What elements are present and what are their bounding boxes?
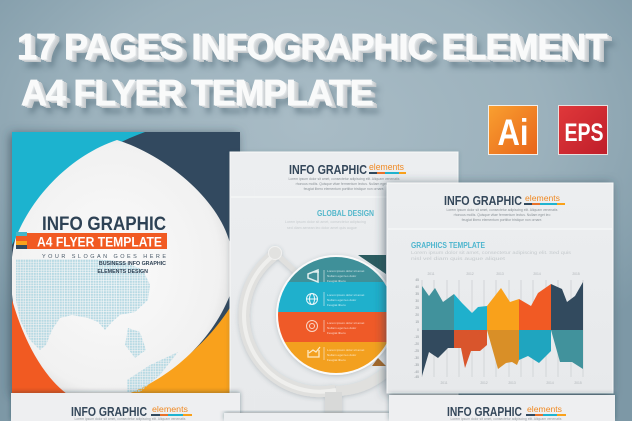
cover orange banner: A4 FLYER TEMPLATE [37, 234, 162, 250]
page header: rhoncus mollis. Quisque vitae fermentum lectus. Nullam eget leo [454, 213, 550, 217]
icon: chart [308, 347, 320, 357]
panel: bottom right page: INFO GRAPHIC [447, 405, 522, 419]
page header [288, 162, 406, 191]
chart y axis labels: -25 [414, 349, 419, 353]
chart upper areas [422, 282, 583, 330]
chart y axis labels: 40 [415, 285, 419, 289]
cover stripe accent [16, 232, 27, 249]
chart y axis labels: 25 [415, 306, 419, 310]
page header: INFO GRAPHIC [289, 163, 367, 177]
panel: bottom right page: Lorem ipsum dolor sit amet, consectetur adipiscing elit. Aliquam venenatis [450, 417, 562, 421]
chart y axis labels: -40 [414, 370, 419, 374]
page header: feugiat libero elementum porttitor tristique non ornare. [304, 187, 384, 191]
cover subheading: ELEMENTS DESIGN [97, 269, 148, 275]
band captions: Nullam eget leo dolor [327, 274, 356, 278]
page header [444, 193, 565, 222]
page header: rhoncus mollis. Quisque vitae fermentum lectus. Nullam eget leo [296, 182, 392, 186]
icon: globe [306, 294, 318, 304]
panel: global design page [230, 152, 458, 414]
chart x axis labels: 2014 [546, 381, 554, 385]
page header: elements [369, 162, 404, 172]
area chart [414, 272, 583, 385]
panel: bottom left page: elements [152, 404, 188, 414]
panel: A4 flyer cover [11, 132, 240, 394]
band captions: Nullam eget leo dolor [327, 298, 356, 302]
chart x axis labels: 2015 [574, 381, 582, 385]
page header: elements [525, 193, 560, 203]
section body text: sed diam aenean leo dolor amet quis augue [287, 226, 357, 230]
icon: Adobe Illustrator badge: Ai [498, 112, 528, 153]
chart x axis labels: 2012 [480, 381, 488, 385]
chart y axis labels: 15 [415, 320, 419, 324]
panel: graphics template page [387, 183, 613, 393]
chart lower areas [422, 330, 583, 376]
section body text: Lorem ipsum dolor sit amet, consectetur adipiscing elit. Sed quis [411, 250, 571, 255]
band captions: Lorem ipsum dolor sit amet [327, 321, 364, 325]
panel: bottom right page: elements [527, 404, 562, 414]
chart y axis labels [414, 278, 419, 379]
chart x axis labels: 2012 [466, 272, 474, 276]
cover slogan: YOUR SLOGAN GOES HERE [42, 254, 166, 260]
cover subheading [97, 261, 166, 275]
panel: bottom left page: Lorem ipsum dolor sit amet, consectetur adipiscing elit. Aliquam venenatis [74, 417, 186, 421]
icon: target [306, 320, 318, 332]
band captions: Feugiat libero [327, 303, 346, 307]
band captions: Feugiat libero [327, 331, 346, 335]
page header: Lorem ipsum dolor sit amet, consectetur adipiscing elit. Aliquam venenatis [288, 177, 400, 181]
band captions: Feugiat libero [327, 279, 346, 283]
chart y axis labels: 0 [417, 328, 419, 332]
panel: bottom right page [389, 395, 615, 421]
icon: Adobe Illustrator badge [488, 106, 538, 154]
page header: INFO GRAPHIC [444, 194, 522, 208]
panel: bottom left page [11, 393, 240, 421]
cover dotted world map [16, 259, 178, 392]
section body text [411, 250, 571, 261]
band captions: Nullam eget leo dolor [327, 326, 356, 330]
chart x axis labels: 2011 [440, 381, 448, 385]
chart y axis labels: -15 [414, 335, 419, 339]
band captions: Lorem ipsum dolor sit amet [327, 293, 364, 297]
chart x axis labels [427, 272, 582, 385]
title line 2: A4 FLYER TEMPLATE [21, 72, 372, 113]
title line 1: 17 PAGES INFOGRAPHIC ELEMENT [17, 26, 606, 67]
section body text: Lorem ipsum dolor sit amet, consectetur adipiscing [285, 220, 366, 224]
cover heading: INFO GRAPHIC [42, 213, 166, 235]
cover cyan corner [12, 132, 145, 245]
chart x axis labels: 2013 [508, 381, 516, 385]
band captions: Lorem ipsum dolor sit amet [327, 269, 364, 273]
icon: EPS badge [558, 106, 608, 154]
chart x axis labels: 2014 [533, 272, 541, 276]
chart y axis labels: -35 [414, 363, 419, 367]
panel: bottom left page: INFO GRAPHIC [71, 405, 147, 419]
globe dark top wedge [358, 255, 386, 274]
section body text [285, 220, 366, 230]
globe colour bands [278, 257, 386, 373]
chart y axis labels: 35 [415, 292, 419, 296]
globe stand [244, 246, 386, 414]
section heading: graphics template: GRAPHICS TEMPLATE [411, 241, 486, 250]
band captions: Lorem ipsum dolor sit amet [327, 348, 364, 352]
chart y axis labels: -45 [414, 375, 419, 379]
panel: bottom middle page [224, 413, 390, 421]
chart x axis labels: 2015 [572, 272, 580, 276]
band captions: Feugiat libero [327, 358, 346, 362]
chart y axis labels: 30 [415, 299, 419, 303]
page header: feugiat libero elementum porttitor tristique non ornare. [462, 218, 542, 222]
cover white blob [11, 140, 235, 394]
chart y axis labels: -20 [414, 342, 419, 346]
band captions: Nullam eget leo dolor [327, 353, 356, 357]
section heading: global design: GLOBAL DESIGN [317, 209, 374, 218]
band captions [327, 269, 364, 362]
chart y axis labels: -30 [414, 356, 419, 360]
cover orange corner [12, 300, 70, 394]
page header: Lorem ipsum dolor sit amet, consectetur adipiscing elit. Aliquam venenatis [446, 208, 558, 212]
chart y axis labels: 20 [415, 313, 419, 317]
chart x axis labels: 2013 [496, 272, 504, 276]
chart y axis labels: 45 [415, 278, 419, 282]
section body text: nisl vel diam quis augue aliquet [411, 256, 506, 261]
icon: EPS badge: EPS [564, 119, 604, 147]
chart x axis labels: 2011 [427, 272, 435, 276]
globe outer ring [276, 255, 396, 375]
globe bottom wedge [372, 358, 386, 366]
band dividers [323, 270, 325, 360]
icon: megaphone [308, 270, 319, 282]
cover subheading: BUSINESS INFO GRAPHIC [99, 261, 166, 267]
cover yellow corner [125, 290, 240, 394]
